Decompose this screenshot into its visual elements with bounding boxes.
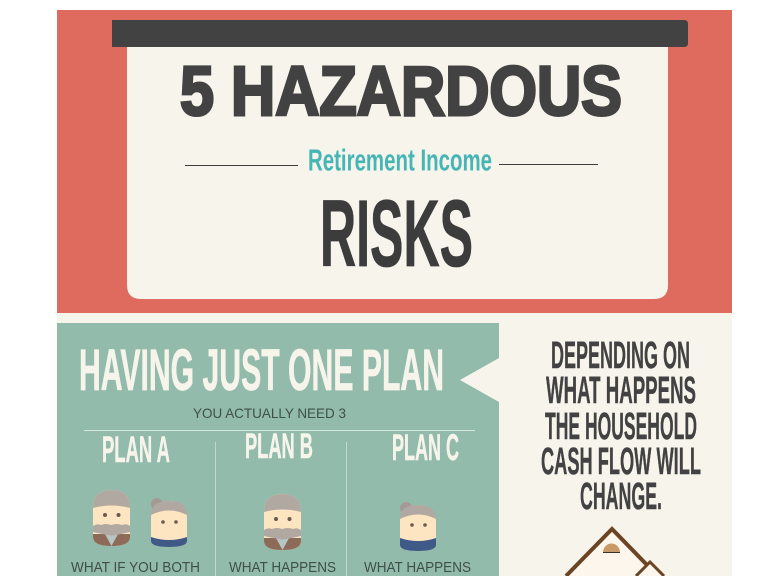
subheading: YOU ACTUALLY NEED 3 xyxy=(193,405,346,421)
heading: HAVING JUST ONE PLAN xyxy=(79,338,444,403)
panel: title banner xyxy=(57,10,732,313)
title: 5 hazardous: 5 HAZARDOUS xyxy=(180,52,622,130)
icon: woman, plan C xyxy=(400,502,436,551)
plan labels: PLAN B xyxy=(245,427,313,466)
icon: woman, plan A xyxy=(151,498,187,547)
plan descriptions: WHAT HAPPENS xyxy=(364,560,471,576)
title: risks: RISKS xyxy=(320,181,473,287)
panel: having just one plan xyxy=(57,323,499,576)
text block: household cash flow: CHANGE. xyxy=(580,476,662,518)
plan labels: PLAN A xyxy=(102,429,170,470)
dark header bar xyxy=(112,20,688,47)
plan descriptions xyxy=(71,560,471,576)
icon: man, plan B xyxy=(264,494,301,550)
panel: having just one plan: PLAN C xyxy=(392,427,459,468)
subtitle: retirement income: Retirement Income xyxy=(308,142,492,178)
text block: household cash flow xyxy=(541,335,701,518)
plan descriptions: WHAT HAPPENS xyxy=(229,560,336,576)
plan descriptions: WHAT IF YOU BOTH xyxy=(71,560,200,576)
icon: man, plan A xyxy=(93,490,130,546)
icon: house xyxy=(566,529,664,576)
plan labels xyxy=(102,427,459,470)
title card xyxy=(127,40,668,299)
